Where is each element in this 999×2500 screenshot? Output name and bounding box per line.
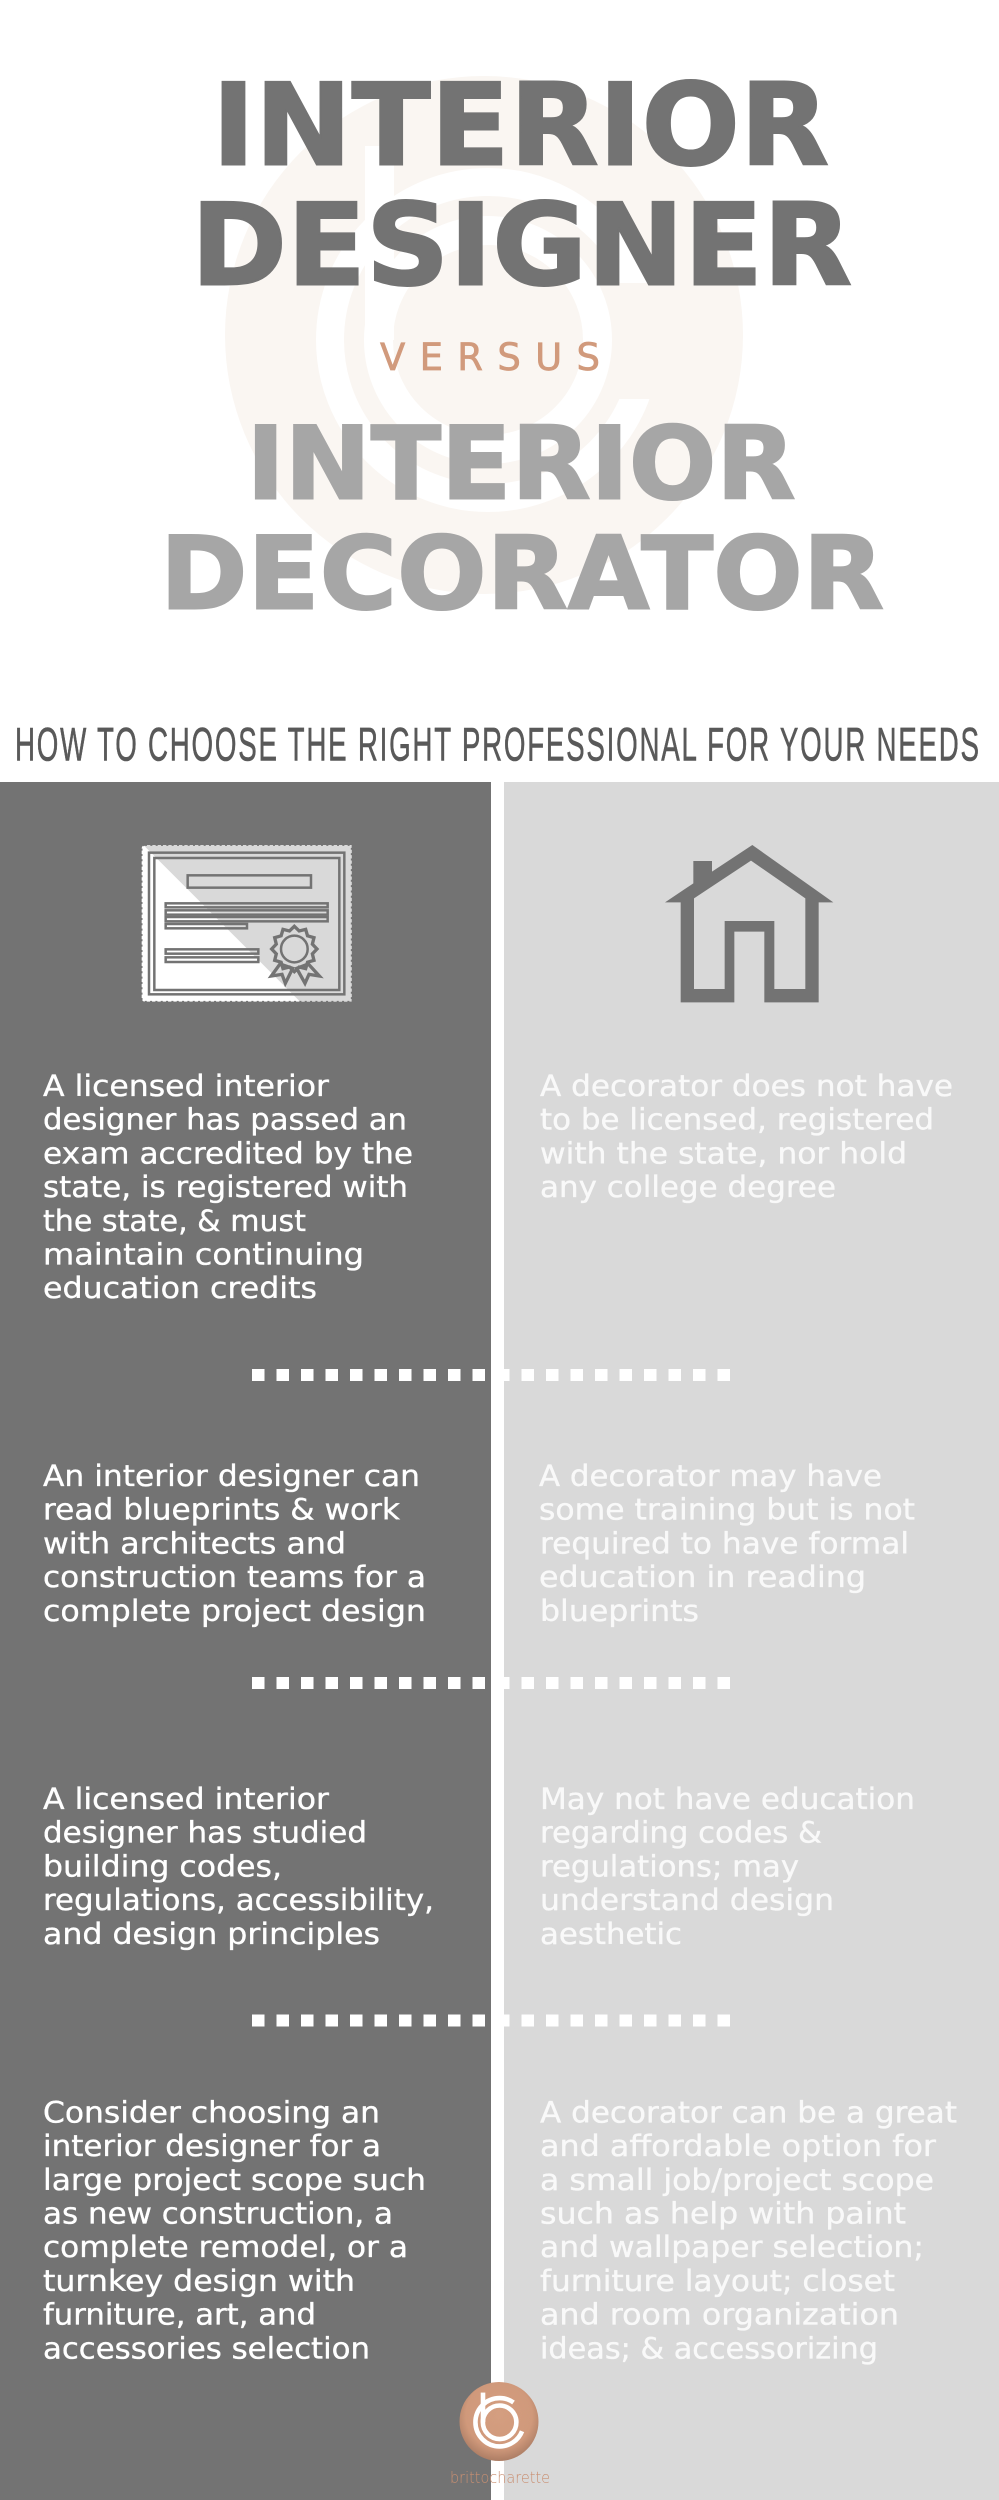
designer text: licensing: maintain continuing xyxy=(43,1238,364,1272)
designer text: codes: designer has studied xyxy=(43,1816,367,1850)
designer text: codes: regulations, accessibility, xyxy=(43,1883,434,1917)
designer text: licensing: exam accredited by the xyxy=(43,1136,413,1170)
panel: designer column xyxy=(0,782,491,2500)
versus label: VERSUS xyxy=(380,336,600,379)
designer text: licensing: state, is registered with xyxy=(43,1170,408,1204)
decorator text: codes: regulations; may xyxy=(540,1849,799,1883)
decorator text: project scope: ideas; & accessorizing xyxy=(540,2331,878,2365)
decorator text: blueprints: required to have formal xyxy=(540,1526,909,1560)
title: interior decorator: DECORATOR xyxy=(160,514,884,632)
decorator text: project scope: and room organization xyxy=(540,2298,899,2332)
title: interior designer xyxy=(191,60,852,312)
decorator text: blueprints: some training but is not xyxy=(539,1493,915,1527)
logo badge xyxy=(460,2382,538,2461)
designer text: licensing: education credits xyxy=(43,1271,317,1305)
decorator text: blueprints: blueprints xyxy=(540,1594,699,1628)
designer text: project scope: furniture, art, and xyxy=(43,2298,316,2332)
watermark: bc logo xyxy=(225,76,743,594)
decorator text: codes xyxy=(540,1782,915,1951)
designer text: codes xyxy=(43,1782,434,1951)
title: interior decorator: INTERIOR xyxy=(246,404,795,522)
designer text: licensing: designer has passed an xyxy=(43,1103,407,1137)
decorator text: codes: aesthetic xyxy=(540,1917,682,1951)
decorator text: project scope: a small job/project scope xyxy=(540,2163,934,2197)
decorator text: project scope: such as help with paint xyxy=(540,2196,906,2230)
designer text: licensing: the state, & must xyxy=(43,1204,306,1238)
designer text: licensing xyxy=(43,1069,413,1305)
decorator text: project scope xyxy=(540,2095,957,2365)
designer text: codes: A licensed interior xyxy=(43,1782,330,1816)
designer text: project scope: accessories selection xyxy=(43,2331,370,2365)
designer text: blueprints xyxy=(43,1459,426,1628)
designer text: project scope: as new construction, a xyxy=(43,2196,393,2230)
decorator text: blueprints: A decorator may have xyxy=(539,1459,882,1493)
title: interior decorator xyxy=(160,404,884,632)
icon: house xyxy=(665,845,833,1002)
decorator text: codes: May not have education xyxy=(540,1782,915,1816)
panel: decorator column xyxy=(504,782,999,2500)
designer text: codes: and design principles xyxy=(43,1917,380,1951)
divider 3 xyxy=(252,2014,730,2026)
decorator text: project scope: furniture layout; closet xyxy=(540,2264,895,2298)
decorator text: codes: understand design xyxy=(540,1883,834,1917)
decorator text: codes: regarding codes & xyxy=(540,1816,822,1850)
designer text: blueprints: construction teams for a xyxy=(43,1560,426,1594)
designer text: project scope: interior designer for a xyxy=(43,2129,381,2163)
decorator text: project scope: and affordable option for xyxy=(540,2129,937,2163)
designer text: blueprints: with architects and xyxy=(43,1526,346,1560)
designer text: licensing: A licensed interior xyxy=(43,1069,330,1103)
logo wordmark: brittocharette xyxy=(450,2468,550,2487)
designer text: project scope: turnkey design with xyxy=(43,2264,355,2298)
title: interior designer: INTERIOR xyxy=(212,60,829,192)
decorator text: licensing: A decorator does not have xyxy=(540,1069,953,1103)
decorator text: licensing: to be licensed, registered xyxy=(540,1103,934,1137)
decorator text: project scope: and wallpaper selection; xyxy=(540,2230,924,2264)
designer text: project scope xyxy=(43,2095,426,2365)
divider 1 xyxy=(252,1369,730,1381)
designer text: project scope: Consider choosing an xyxy=(43,2095,380,2129)
decorator text: licensing xyxy=(540,1069,953,1204)
designer text: blueprints: An interior designer can xyxy=(43,1459,420,1493)
decorator text: blueprints xyxy=(539,1459,915,1628)
decorator text: project scope: A decorator can be a great xyxy=(540,2095,957,2129)
icon: diploma certificate xyxy=(142,845,352,1002)
decorator text: licensing: any college degree xyxy=(540,1170,836,1204)
divider 2 xyxy=(252,1677,730,1689)
decorator text: blueprints: education in reading xyxy=(539,1560,866,1594)
subtitle: HOW TO CHOOSE THE RIGHT PROFESSIONAL FOR YOUR NEEDS xyxy=(15,719,979,771)
designer text: project scope: complete remodel, or a xyxy=(43,2230,408,2264)
decorator text: licensing: with the state, nor hold xyxy=(540,1136,907,1170)
designer text: codes: building codes, xyxy=(43,1849,282,1883)
designer text: blueprints: read blueprints & work xyxy=(43,1493,400,1527)
designer text: blueprints: complete project design xyxy=(43,1594,426,1628)
designer text: project scope: large project scope such xyxy=(43,2163,426,2197)
title: interior designer: DESIGNER xyxy=(191,180,852,312)
